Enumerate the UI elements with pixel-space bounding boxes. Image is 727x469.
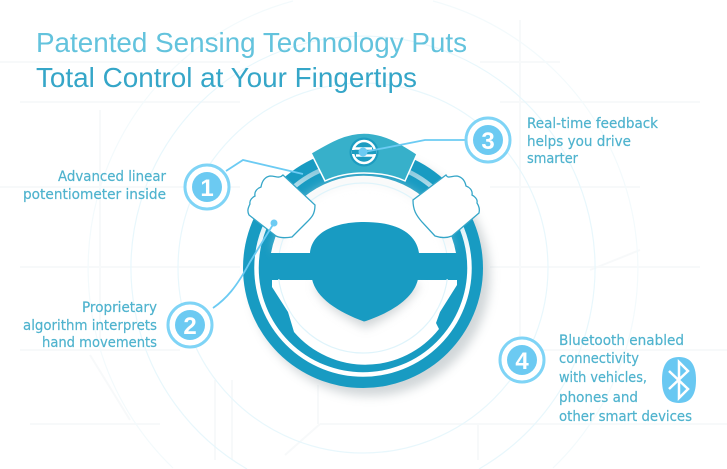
upper window shade <box>276 180 450 250</box>
icon: control logo <box>350 138 378 166</box>
badge 1 <box>185 165 229 209</box>
title <box>36 27 467 93</box>
hub and spokes <box>270 222 456 322</box>
left hand <box>248 175 315 238</box>
label 1 text: potentiometer inside <box>23 187 166 203</box>
badge 2: 2 <box>183 313 197 340</box>
label 4 text <box>559 333 692 425</box>
label 2 text: Proprietary <box>82 300 157 316</box>
label 4 text: with vehicles, <box>559 370 647 386</box>
label 2 text: algorithm interprets <box>23 318 157 334</box>
label 3 text <box>527 116 659 167</box>
wheel rim <box>243 148 483 388</box>
title: Total Control at Your Fingertips <box>36 62 417 93</box>
title: Patented Sensing Technology Puts <box>36 27 467 58</box>
right hand <box>413 175 479 238</box>
top control segment <box>311 133 417 181</box>
label 4 text: Bluetooth enabled <box>559 333 684 349</box>
badge 3: 3 <box>481 128 495 155</box>
connector 3 <box>358 140 466 156</box>
inner pale circle <box>278 183 448 353</box>
icon: bluetooth <box>662 357 696 403</box>
inner white ring <box>256 162 470 374</box>
badge 1: 1 <box>200 175 214 202</box>
label 2 text <box>23 300 157 351</box>
label 3 text: smarter <box>527 151 578 167</box>
badge 4 <box>500 338 544 382</box>
wheel shadow <box>250 156 490 396</box>
label 2 text: hand movements <box>42 335 157 351</box>
label 1 text <box>23 169 166 203</box>
hub shadow <box>314 284 420 328</box>
label 1 text: Advanced linear <box>58 169 166 185</box>
label 3 text: Real-time feedback <box>527 116 659 132</box>
connector 1 <box>226 160 303 174</box>
connector 2 <box>213 220 278 308</box>
label 3 text: helps you drive <box>527 134 631 150</box>
label 4 text: other smart devices <box>559 409 692 425</box>
label 4 text: phones and <box>559 390 638 406</box>
steering wheel <box>243 133 490 396</box>
upper window <box>271 176 456 253</box>
badge 4: 4 <box>515 348 529 375</box>
badge 2 <box>168 303 212 347</box>
label 4 text: connectivity <box>559 351 639 367</box>
lower window <box>272 280 457 365</box>
badge 3 <box>466 118 510 162</box>
